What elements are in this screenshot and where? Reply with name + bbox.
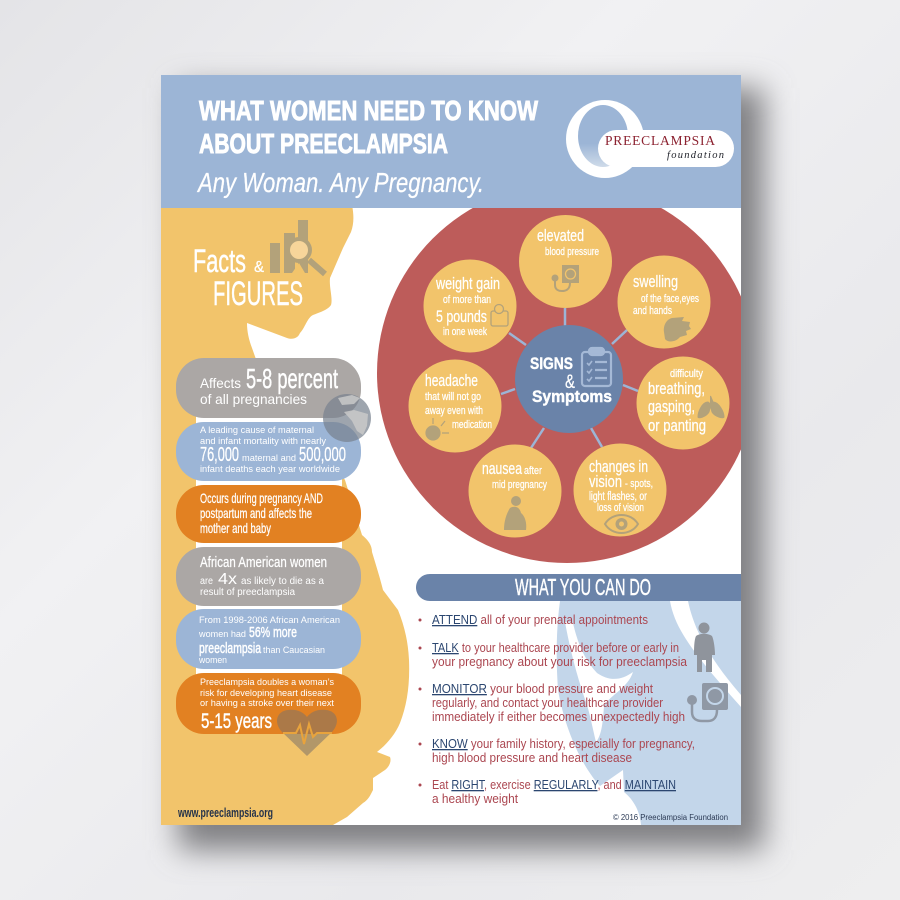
silhouette: pregnant woman in profile (161, 205, 409, 825)
icon: clipboard (582, 348, 611, 386)
fact: mortality: 76,000 (200, 444, 239, 466)
fact: African American women: are (200, 576, 213, 587)
item: know: KNOW your family history, especially for pregnancy, (432, 736, 695, 751)
heading: facts and figures: FIGURES (213, 275, 303, 313)
symptom: headache: medication (452, 419, 492, 431)
symptom: weight gain: of more than (443, 294, 491, 306)
symptom: elevated blood pressure: elevated (537, 226, 584, 245)
connector lines (501, 308, 638, 448)
fact: 5-8 percent (176, 358, 361, 418)
fact: 5-8 percent: of all pregnancies (200, 391, 307, 407)
centre: signs and symptoms (515, 325, 623, 433)
item: monitor: regularly, and contact your healthcare provider (432, 695, 664, 710)
symptom: headache (408, 360, 502, 452)
logo: Preeclampsia Foundation: foundation (667, 150, 724, 161)
fact: African American women: 4x (218, 571, 237, 588)
fact: heart disease risk (176, 673, 361, 734)
icon: hand (664, 317, 691, 341)
fact: African American women: African American women (200, 554, 327, 571)
symptom: weight gain (424, 260, 516, 352)
symptom: nausea: mid pregnancy (492, 479, 547, 491)
heading: facts and figures (193, 220, 325, 313)
symptom: changes in vision: light flashes, or (589, 491, 647, 503)
fact: mortality (176, 422, 361, 481)
copyright: © 2016 Preeclampsia Foundation (613, 813, 728, 822)
item: eat right: Eat RIGHT, exercise REGULARLY, and MAINTAIN (432, 777, 676, 792)
tagline: Any Woman. Any Pregnancy. (196, 167, 484, 198)
poster (161, 75, 757, 825)
fact: pregnancy and postpartum: Occurs during pregnancy AND (200, 490, 323, 506)
symptom: swelling: of the face,eyes (641, 293, 699, 305)
fact: mortality: maternal and (242, 453, 296, 464)
fact: 5-8 percent: 5-8 percent (246, 363, 338, 394)
symptom: difficulty breathing: breathing, (648, 379, 705, 398)
fact: 56% more preeclampsia: 56% more (249, 624, 297, 641)
fact: pregnancy and postpartum (176, 485, 361, 543)
symptom: difficulty breathing: difficulty (670, 368, 703, 380)
fact: 56% more preeclampsia: women (198, 655, 227, 666)
icon: heart with pulse (277, 710, 337, 756)
fact: 56% more preeclampsia: women had (198, 629, 246, 640)
icon: scale (491, 304, 508, 326)
icon: globe (323, 394, 371, 442)
item: talk: your pregnancy about your risk for preeclampsia (432, 654, 688, 669)
heading: what you can do: WHAT YOU CAN DO (515, 574, 651, 600)
item: talk: TALK to your healthcare provider before or early in (432, 640, 679, 655)
logo: Preeclampsia Foundation (566, 100, 734, 178)
fact: pregnancy and postpartum: mother and baby (200, 520, 271, 536)
symptom: headache: away even with (425, 405, 483, 417)
symptom: difficulty breathing (636, 356, 730, 450)
website url: www.preeclampsia.org (177, 805, 273, 820)
symptom: swelling (618, 256, 710, 348)
symptom: nausea: after (524, 465, 542, 477)
symptom: changes in vision: - spots, (625, 478, 653, 490)
symptom: nausea: nausea (482, 459, 522, 478)
title: ABOUT PREECLAMPSIA (199, 128, 448, 159)
icon: doctor (694, 622, 715, 672)
symptom: weight gain: 5 pounds (436, 307, 487, 326)
fact: 56% more preeclampsia: than Caucasian (263, 645, 325, 656)
heading: facts and figures: Facts (193, 243, 246, 279)
fact: heart disease risk: risk for developing heart disease (200, 688, 332, 699)
fact: 56% more preeclampsia: From 1998-2006 African American (199, 615, 340, 626)
icon: eye (605, 515, 638, 533)
item: know (418, 736, 695, 765)
symptom: headache: headache (425, 371, 478, 390)
symptom: difficulty breathing: or panting (648, 416, 706, 435)
fact: 5-8 percent: Affects (200, 375, 241, 391)
title (198, 100, 538, 154)
symptom: changes in vision: changes in (589, 457, 648, 476)
icon: blood pressure monitor (687, 683, 728, 721)
heading: what you can do (416, 574, 741, 601)
fact: African American women: result of preeclampsia (200, 587, 295, 598)
fact: mortality: and infant mortality with nearly (200, 436, 326, 447)
fact: mortality: 500,000 (299, 444, 346, 466)
symptom: changes in vision: vision (589, 472, 622, 491)
item: attend (418, 614, 648, 626)
centre: signs and symptoms: & (565, 372, 575, 393)
symptom: difficulty breathing: gasping, (648, 397, 695, 416)
fact: mortality: infant deaths each year worldwide (200, 464, 340, 475)
fact: heart disease risk: 5-15 years (201, 710, 272, 733)
title: WHAT WOMEN NEED TO KNOW (199, 95, 538, 126)
symptom: weight gain: in one week (443, 326, 487, 338)
item: know: high blood pressure and heart disease (432, 750, 632, 765)
item: attend: ATTEND all of your prenatal appointments (432, 612, 648, 627)
fact: heart disease risk: Preeclampsia doubles a woman’s (200, 677, 334, 688)
item: eat right (418, 777, 676, 806)
symptom: changes in vision (574, 444, 666, 536)
icon: lungs (698, 396, 724, 418)
action list (418, 612, 695, 806)
header band (161, 75, 741, 208)
item: monitor: immediately if either becomes unexpectedly high (432, 709, 685, 724)
fact: 56% more preeclampsia: preeclampsia (199, 640, 261, 657)
symptom: elevated blood pressure (519, 215, 612, 308)
icon: bar chart and magnifier (270, 220, 325, 274)
signs and symptoms circle (377, 208, 741, 563)
symptom: nausea (468, 444, 562, 538)
facts pills (176, 358, 371, 756)
item: monitor (418, 681, 685, 724)
item: eat right: a healthy weight (432, 791, 518, 806)
symptom: elevated blood pressure: blood pressure (545, 246, 599, 258)
fact: African American women (176, 547, 361, 606)
symptom: swelling: and hands (633, 305, 672, 317)
icon: pregnant woman (504, 496, 526, 530)
icon: blood pressure cuff (552, 265, 579, 291)
fact: 56% more preeclampsia (176, 609, 361, 669)
icon: head ache burst (426, 418, 449, 440)
silhouette: mother and baby, lower right (557, 601, 741, 825)
symptom: swelling: swelling (633, 272, 678, 291)
logo: Preeclampsia Foundation: PREECLAMPSIA (605, 133, 715, 148)
centre: signs and symptoms: Symptoms (532, 387, 612, 406)
centre: signs and symptoms: SIGNS (530, 354, 573, 373)
heading: facts and figures: & (254, 259, 264, 276)
item: talk (418, 640, 688, 669)
item: monitor: MONITOR your blood pressure and weight (432, 681, 653, 696)
symptom: headache: that will not go (425, 391, 481, 403)
fact: mortality: A leading cause of maternal (200, 425, 314, 436)
fact: heart disease risk: or having a stroke over their next (200, 698, 334, 709)
fact: African American women: as likely to die as a (241, 576, 324, 587)
fact: pregnancy and postpartum: postpartum and affects the (200, 505, 312, 521)
symptom: changes in vision: loss of vision (597, 502, 644, 514)
symptom: weight gain: weight gain (435, 274, 500, 293)
